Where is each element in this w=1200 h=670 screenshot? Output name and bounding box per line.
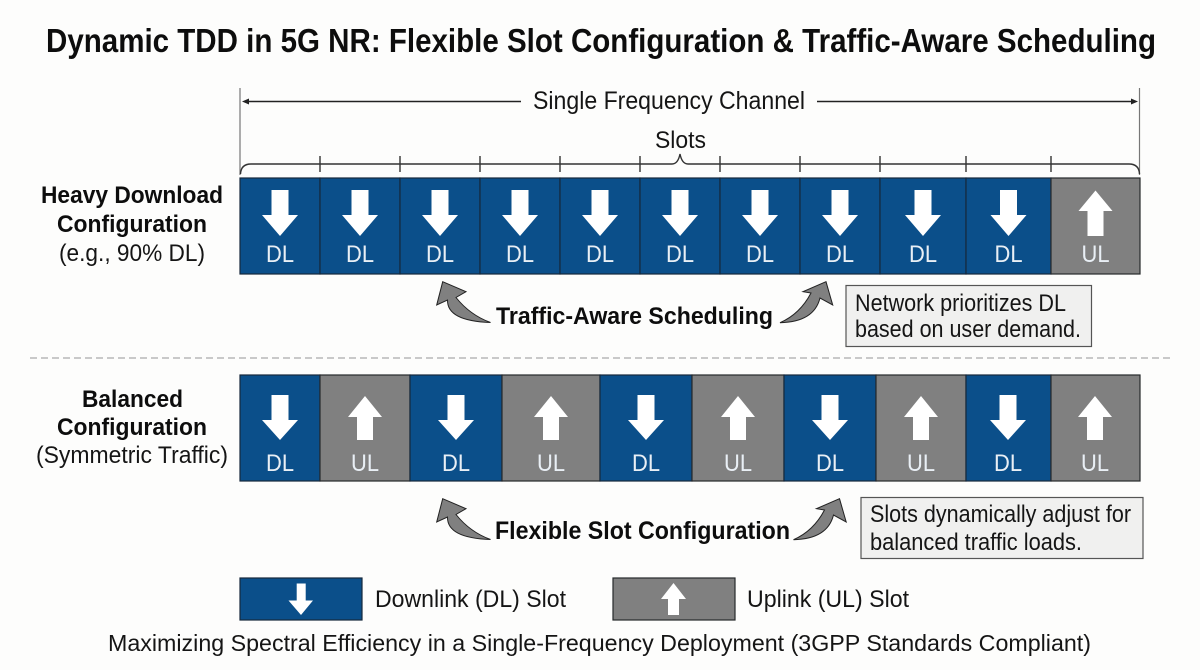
label: flexible slot configuration with curved arrows — [437, 499, 846, 545]
legend: downlink slot: Downlink (DL) Slot — [375, 586, 566, 613]
DL slot 2: DL — [346, 241, 374, 268]
heading: heavy download configuration — [41, 182, 223, 267]
slot row: balanced — [240, 375, 1140, 481]
heading: balanced configuration: Balanced — [82, 386, 183, 413]
DL slot 3: DL — [442, 450, 470, 477]
DL slot 4 — [480, 178, 560, 274]
UL slot 10 — [1051, 375, 1140, 481]
label: traffic-aware scheduling with curved arrows — [437, 282, 833, 330]
UL slot 11 — [1051, 178, 1140, 274]
DL slot 7: DL — [746, 241, 774, 268]
DL slot 1 — [240, 178, 320, 274]
DL slot 9: DL — [994, 450, 1022, 477]
channel width dimension arrow: Single Frequency Channel — [533, 87, 805, 115]
curved arrow left — [437, 499, 490, 540]
DL slot 1 — [240, 375, 320, 481]
DL slot 2 — [320, 178, 400, 274]
DL slot 5 — [560, 178, 640, 274]
UL slot 8: UL — [907, 450, 935, 477]
DL slot 5: DL — [586, 241, 614, 268]
UL slot 2: UL — [351, 450, 379, 477]
heading: balanced configuration: Configuration — [57, 414, 207, 441]
UL slot 6: UL — [724, 450, 752, 477]
DL slot 9 — [966, 375, 1051, 481]
UL slot 10: UL — [1081, 450, 1109, 477]
DL slot 3 — [410, 375, 502, 481]
slot row: heavy download — [240, 178, 1140, 274]
label: traffic-aware scheduling with curved arrows: Traffic-Aware Scheduling — [496, 303, 773, 330]
DL slot 3: DL — [426, 241, 454, 268]
DL slot 10: DL — [994, 241, 1022, 268]
DL slot 7 — [720, 178, 800, 274]
DL slot 5 — [600, 375, 692, 481]
footer caption: Maximizing Spectral Efficiency in a Single-Frequency Deployment (3GPP Standards Compliant) — [108, 630, 1091, 656]
legend: uplink slot — [613, 578, 909, 620]
UL slot 11: UL — [1082, 241, 1110, 268]
DL slot 9 — [880, 178, 966, 274]
DL slot 9: DL — [909, 241, 937, 268]
heading: heavy download configuration: Heavy Download — [41, 182, 223, 209]
DL slot 8 — [800, 178, 880, 274]
channel width dimension arrow — [240, 87, 1140, 175]
slots brace — [240, 127, 1140, 174]
UL slot 4: UL — [537, 450, 565, 477]
slots brace: Slots — [655, 127, 706, 154]
curved arrow right — [780, 282, 833, 323]
DL slot 7 — [784, 375, 876, 481]
UL slot 6 — [692, 375, 784, 481]
callout: slots dynamically adjust: Slots dynamically adjust for — [870, 501, 1131, 528]
DL slot 7: DL — [816, 450, 844, 477]
DL slot 5: DL — [632, 450, 660, 477]
curved arrow left — [437, 282, 490, 322]
callout: slots dynamically adjust — [861, 498, 1143, 558]
legend: downlink slot — [240, 578, 566, 620]
DL slot 1: DL — [266, 241, 294, 268]
DL slot 6 — [640, 178, 720, 274]
UL slot 4 — [502, 375, 600, 481]
UL slot 2 — [320, 375, 410, 481]
heading: heavy download configuration: (e.g., 90% DL) — [59, 240, 205, 267]
curved arrow right — [794, 499, 846, 540]
legend: uplink slot: Uplink (UL) Slot — [747, 586, 909, 613]
callout: slots dynamically adjust: balanced traffic loads. — [870, 529, 1082, 556]
callout: network prioritizes DL — [846, 286, 1092, 346]
heading: balanced configuration — [36, 386, 228, 469]
label: flexible slot configuration with curved arrows: Flexible Slot Configuration — [495, 517, 790, 545]
callout: network prioritizes DL: based on user demand. — [855, 316, 1081, 343]
UL slot 8 — [876, 375, 966, 481]
legend — [240, 578, 909, 620]
DL slot 1: DL — [266, 450, 294, 477]
callout: network prioritizes DL: Network prioritizes DL — [855, 290, 1066, 317]
DL slot 8: DL — [826, 241, 854, 268]
DL slot 6: DL — [666, 241, 694, 268]
heading: balanced configuration: (Symmetric Traffic) — [36, 442, 228, 469]
DL slot 3 — [400, 178, 480, 274]
DL slot 10 — [966, 178, 1051, 274]
heading: heavy download configuration: Configuration — [57, 211, 207, 238]
DL slot 4: DL — [506, 241, 534, 268]
